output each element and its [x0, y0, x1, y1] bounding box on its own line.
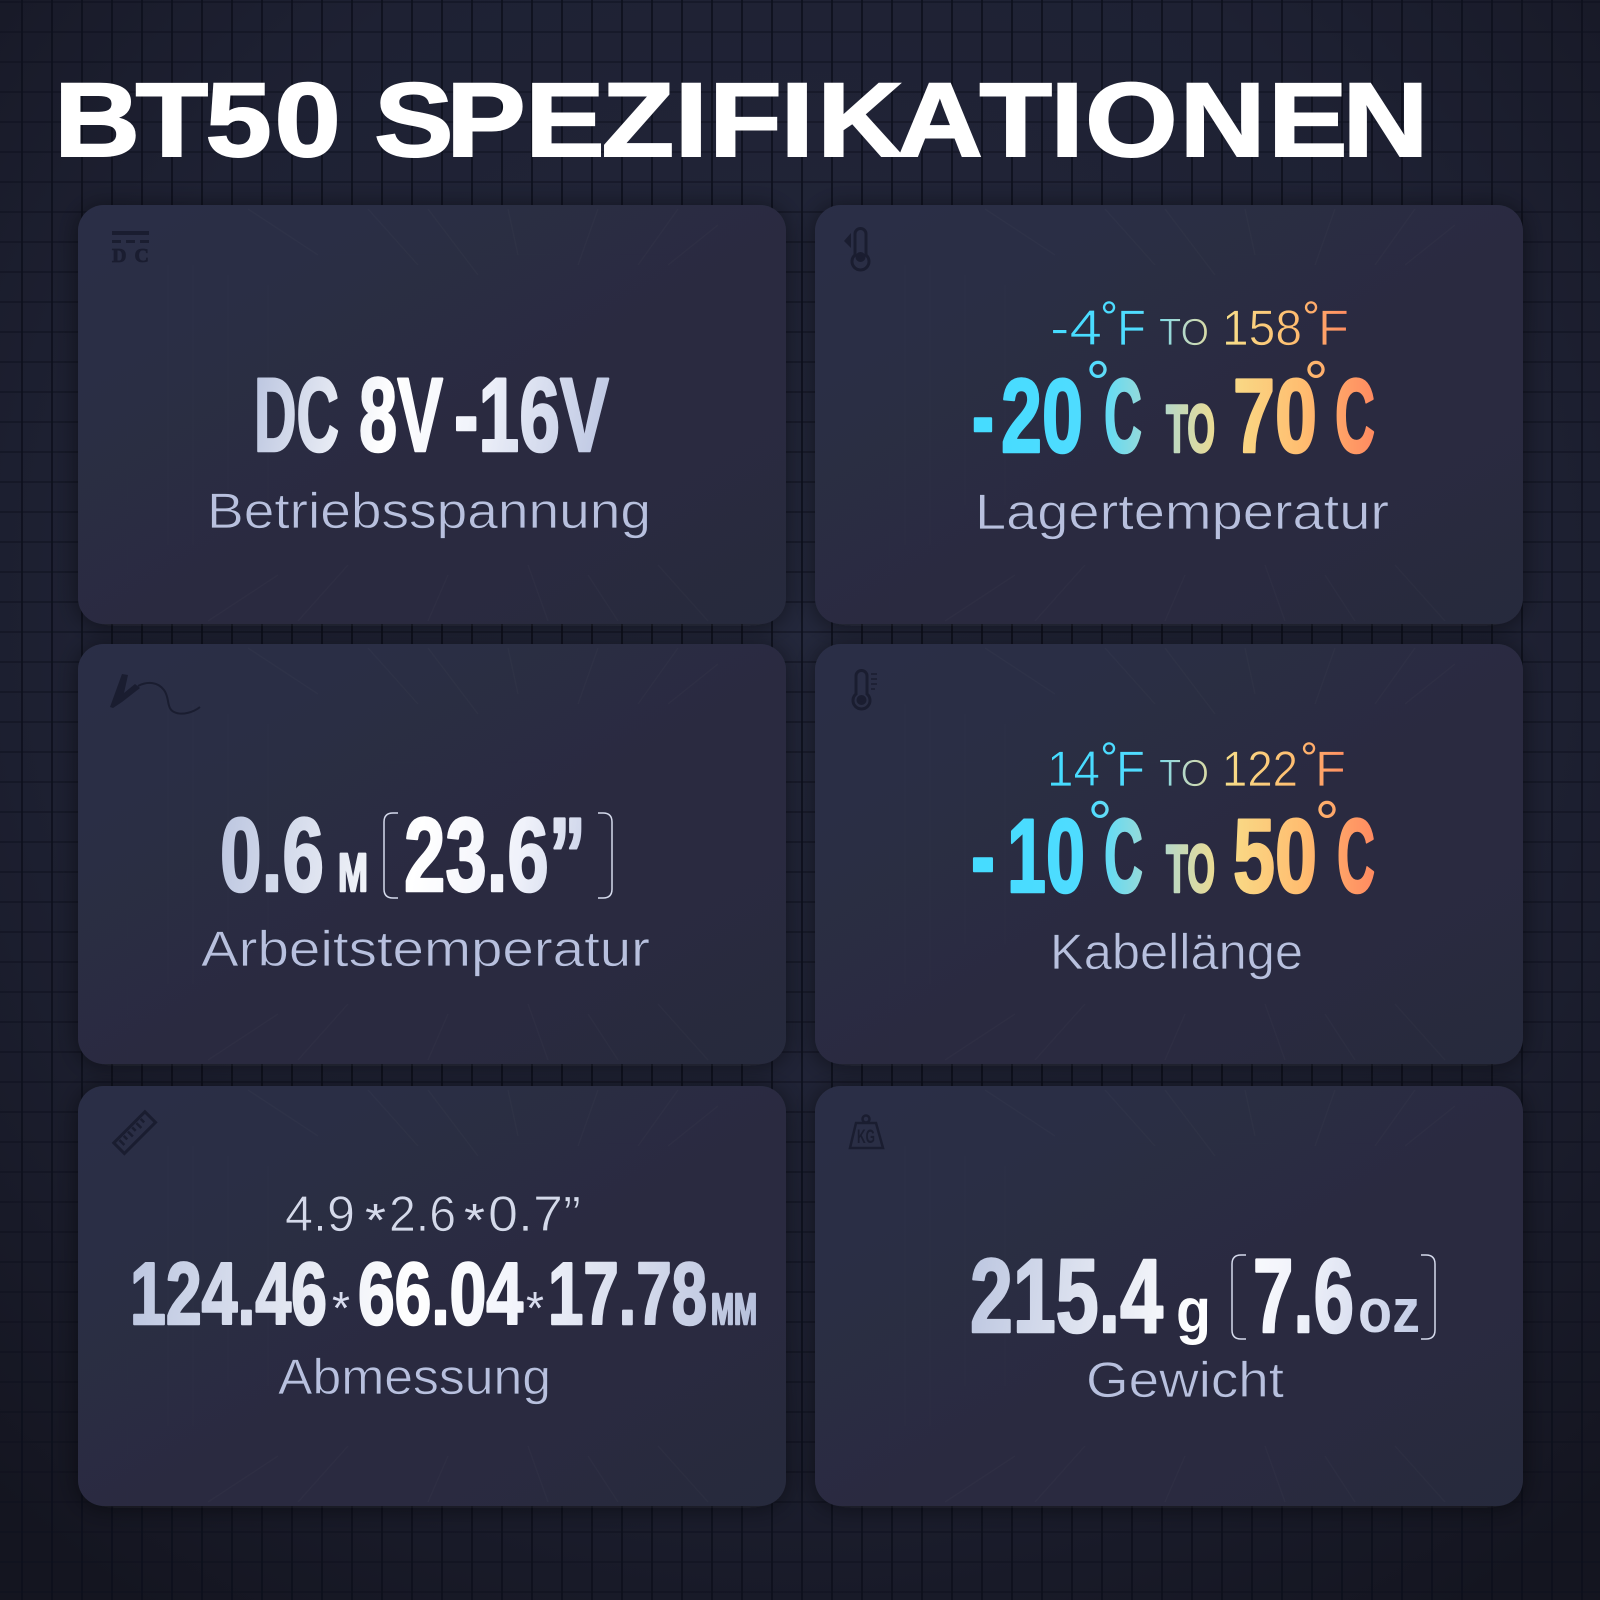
value: inches: *	[365, 1194, 386, 1246]
value: celsius range: 70	[1233, 358, 1317, 475]
value: fahrenheit range: 14	[1047, 741, 1100, 797]
value: celsius range: -	[971, 798, 995, 915]
value: celsius range: °	[1304, 349, 1328, 418]
label: Betriebsspannung	[207, 483, 651, 539]
value: cable length	[220, 797, 586, 914]
value: weight: oz	[1358, 1277, 1420, 1346]
value: fahrenheit range	[1047, 734, 1346, 797]
icon: thermometer	[844, 228, 869, 270]
value: celsius range: °	[1088, 789, 1112, 858]
value: inches: 2.6	[389, 1186, 456, 1242]
value: fahrenheit range	[1050, 293, 1349, 356]
value: celsius range: °	[1315, 789, 1339, 858]
value: millimetres: MM	[711, 1285, 757, 1334]
panel: Gewicht	[815, 1086, 1523, 1506]
label: Gewicht	[1086, 1352, 1284, 1408]
panel: Arbeitstemperatur	[78, 644, 786, 1064]
icon: kilogram weight	[850, 1116, 883, 1148]
value: celsius range: 50	[1233, 798, 1317, 915]
value: inches	[285, 1186, 581, 1246]
value: celsius range	[971, 789, 1375, 915]
value: inches: 4.9	[285, 1186, 355, 1242]
value: millimetres: 66.04	[358, 1244, 523, 1343]
label: Abmessung	[278, 1349, 551, 1405]
value: cable length: 23.6”	[404, 797, 586, 914]
value: fahrenheit range: F	[1315, 741, 1346, 797]
value: weight: 215.4	[970, 1238, 1163, 1355]
value: fahrenheit range: 122	[1222, 741, 1298, 797]
value: celsius range: C	[1335, 358, 1375, 475]
value: fahrenheit range: TO	[1159, 753, 1209, 795]
value: weight: 7.6	[1253, 1238, 1354, 1355]
value: millimetres: 124.46	[130, 1244, 327, 1343]
value: fahrenheit range: °	[1100, 293, 1118, 342]
value: inches: *	[464, 1194, 485, 1246]
value: millimetres	[130, 1244, 757, 1343]
title: BT50 SPEZIFIKATIONEN	[54, 61, 1428, 178]
value: millimetres: *	[332, 1282, 350, 1334]
value: millimetres: *	[526, 1282, 544, 1334]
value: fahrenheit range: °	[1300, 734, 1318, 783]
value: fahrenheit range: -4	[1050, 300, 1102, 356]
value: weight: g	[1176, 1277, 1211, 1346]
value: fahrenheit range: °	[1100, 734, 1118, 783]
icon: thermometer with scale	[853, 670, 877, 709]
value: fahrenheit range: F	[1318, 300, 1349, 356]
value: celsius range: 20	[1001, 358, 1083, 475]
value: celsius range: C	[1104, 798, 1143, 915]
value: fahrenheit range: TO	[1159, 312, 1209, 354]
value: cable length: 0.6	[220, 797, 324, 914]
label: Lagertemperatur	[975, 484, 1389, 540]
icon: kilogram weight: KG	[857, 1127, 875, 1148]
panel: Abmessung	[78, 1086, 786, 1506]
panel: Kabellänge	[815, 644, 1523, 1064]
panel: Lagertemperatur	[815, 205, 1523, 624]
value: voltage range	[254, 357, 609, 474]
value: celsius range: -	[972, 358, 994, 475]
value: celsius range: TO	[1166, 391, 1215, 467]
value: fahrenheit range: °	[1302, 293, 1320, 342]
value: inches: 0.7”	[488, 1186, 581, 1242]
value: celsius range: C	[1104, 358, 1142, 475]
label: Kabellänge	[1050, 924, 1303, 980]
value: celsius range: C	[1337, 798, 1375, 915]
value: cable length: M	[338, 843, 368, 903]
value: voltage range: DC	[254, 357, 339, 474]
value: voltage range: 8V	[359, 357, 443, 474]
value: celsius range: °	[1086, 349, 1110, 418]
value: weight	[970, 1238, 1420, 1355]
icon: DC symbol: DC	[112, 245, 149, 267]
panel: Betriebsspannung	[78, 205, 786, 624]
icon: ruler	[114, 1112, 156, 1154]
label: Arbeitstemperatur	[201, 921, 650, 977]
value: celsius range: TO	[1166, 831, 1215, 907]
icon: cable clamp	[110, 674, 200, 714]
value: millimetres: 17.78	[548, 1244, 707, 1343]
value: celsius range	[972, 349, 1375, 475]
value: celsius range: 10	[1007, 798, 1085, 915]
value: fahrenheit range: 158	[1222, 300, 1302, 356]
value: voltage range: -16V	[454, 357, 609, 474]
brackets	[1232, 1255, 1435, 1339]
value: fahrenheit range: F	[1116, 741, 1145, 797]
icon: DC symbol	[112, 231, 149, 267]
value: fahrenheit range: F	[1117, 300, 1146, 356]
brackets	[384, 813, 612, 898]
